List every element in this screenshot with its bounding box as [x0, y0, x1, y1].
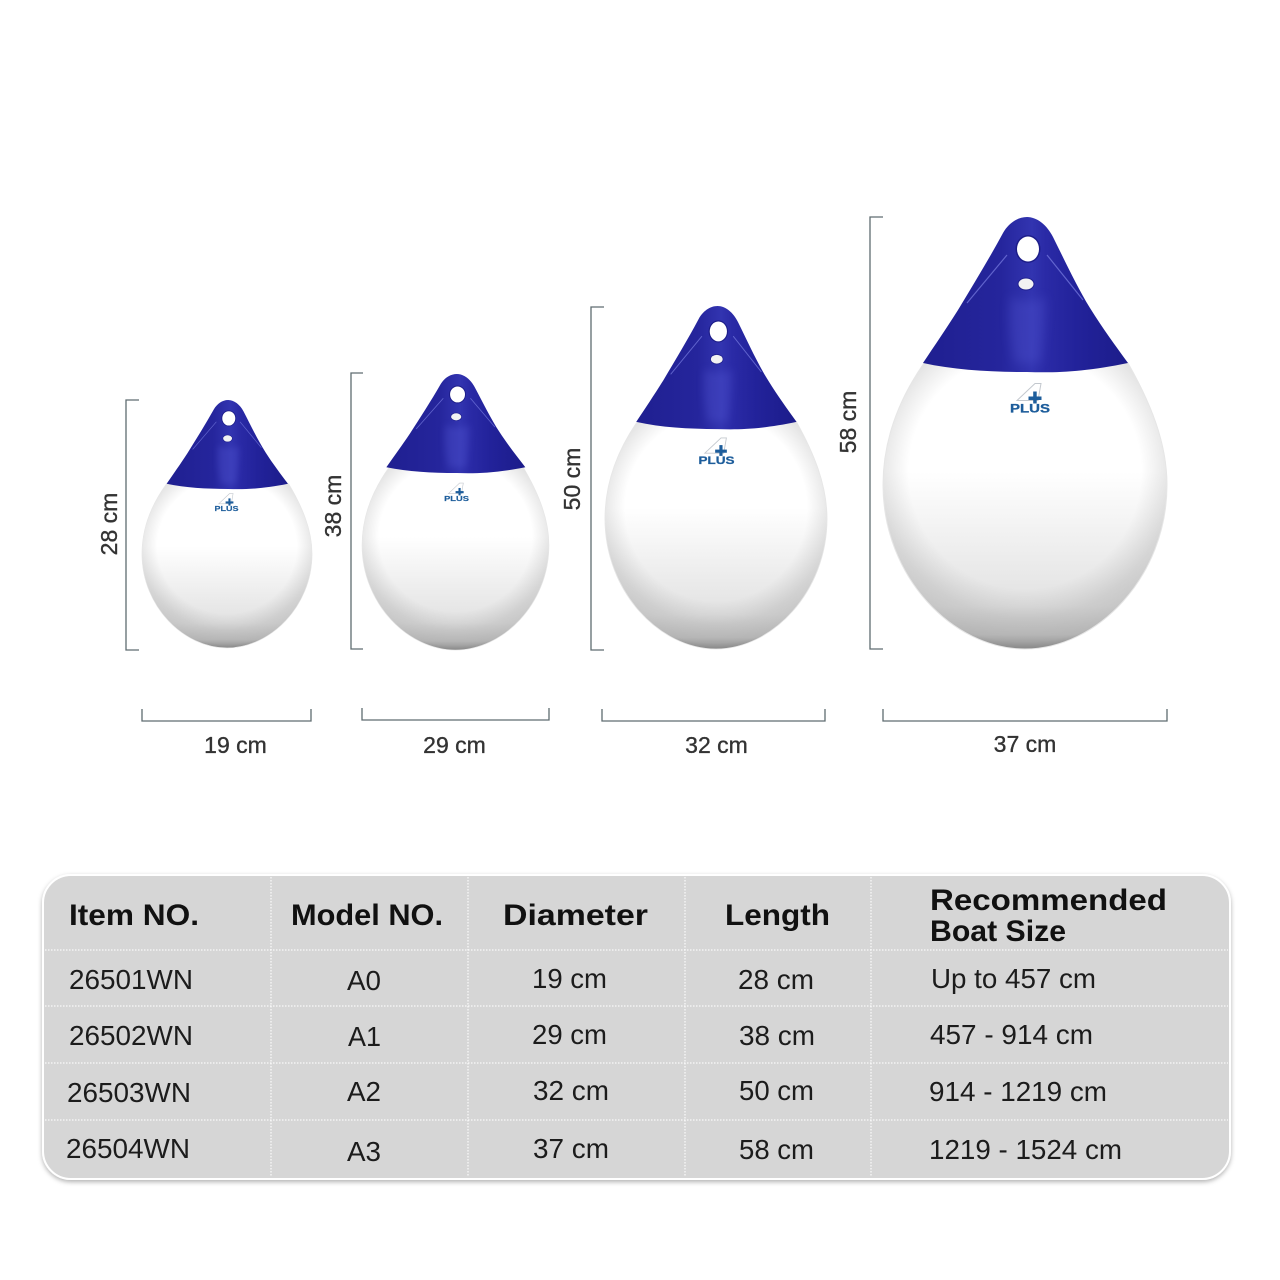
buoy A3 [883, 217, 1167, 649]
row 26504WN: 26504WN [66, 1133, 190, 1164]
row 26504WN: 58 cm [739, 1134, 814, 1165]
row 26502WN: 26502WN [69, 1020, 193, 1051]
row 26503WN: A2 [347, 1076, 381, 1107]
width dimension A2 [602, 709, 825, 758]
logo A2: PLUS [699, 455, 734, 467]
width dimension A0: 19 cm [204, 732, 267, 758]
row 26503WN: 26503WN [67, 1077, 191, 1108]
table header: Boat Size [930, 915, 1066, 948]
logo A0 [214, 494, 239, 513]
logo A0: PLUS [214, 504, 239, 513]
width dimension A2: 32 cm [685, 732, 748, 758]
table header [69, 884, 1167, 948]
width dimension A1 [362, 708, 549, 758]
row 26501WN: A0 [347, 965, 381, 996]
height dimension A1: 38 cm [320, 475, 346, 537]
row 26502WN: 29 cm [532, 1019, 607, 1050]
width dimension A0 [142, 709, 311, 758]
logo A2 [698, 438, 734, 467]
table header: Diameter [503, 899, 648, 932]
row 26502WN: A1 [348, 1021, 381, 1052]
row 26501WN: 19 cm [532, 963, 607, 994]
logo A3: PLUS [1010, 402, 1050, 416]
row 26502WN [69, 1019, 1093, 1052]
height dimension A2: 50 cm [559, 448, 585, 510]
row 26504WN [66, 1133, 1122, 1167]
width dimension A3: 37 cm [994, 731, 1056, 757]
height dimension A3: 58 cm [835, 391, 861, 453]
row 26503WN: 914 - 1219 cm [929, 1076, 1107, 1107]
row 26501WN: 28 cm [738, 964, 814, 995]
row 26504WN: 37 cm [533, 1133, 609, 1164]
height dimension A3 [835, 217, 883, 649]
buoy A0 [142, 400, 312, 648]
width dimension A3 [883, 709, 1167, 757]
width dimension A1: 29 cm [423, 732, 486, 758]
table header: Model NO. [291, 899, 443, 932]
buoy A2 [605, 306, 827, 649]
row 26503WN: 50 cm [739, 1075, 814, 1106]
logo A1 [444, 483, 469, 503]
table header: Recommended [930, 884, 1167, 917]
row 26503WN: 32 cm [533, 1075, 609, 1106]
row 26501WN: Up to 457 cm [931, 963, 1096, 994]
table header: Length [725, 899, 830, 932]
row 26501WN: 26501WN [69, 964, 193, 995]
row 26502WN: 38 cm [739, 1020, 815, 1051]
row 26501WN [69, 963, 1096, 996]
table header: Item NO. [69, 899, 199, 932]
row 26504WN: A3 [347, 1136, 381, 1167]
buoy A1 [362, 374, 549, 650]
specification table [43, 875, 1230, 1179]
logo A3 [1010, 384, 1050, 416]
height dimension A1 [320, 373, 363, 649]
height dimension A0: 28 cm [96, 493, 122, 555]
row 26503WN [67, 1075, 1107, 1108]
row 26504WN: 1219 - 1524 cm [929, 1134, 1122, 1165]
height dimension A0 [96, 400, 139, 650]
height dimension A2 [559, 307, 604, 650]
row 26502WN: 457 - 914 cm [930, 1019, 1093, 1050]
logo A1: PLUS [444, 494, 469, 503]
